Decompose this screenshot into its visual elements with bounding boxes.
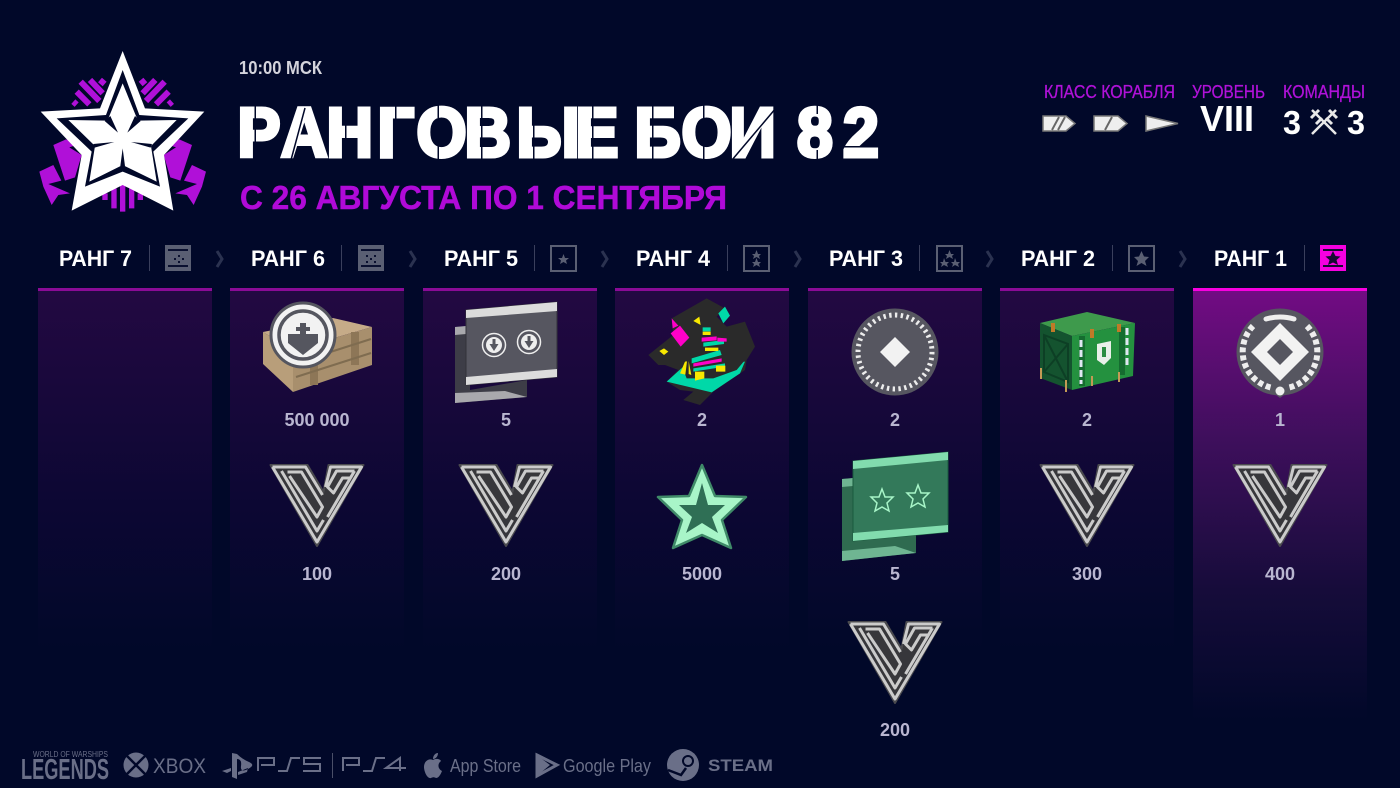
rank 1 <box>1214 245 1346 271</box>
logo: Google Play <box>537 755 651 776</box>
value: 2 <box>890 410 900 430</box>
value: 400 <box>1265 564 1295 584</box>
value: 5 <box>501 410 511 430</box>
title: РАНГОВЫЕ БОИ 82 <box>238 94 879 172</box>
rank 7: РАНГ 7 <box>59 246 132 271</box>
icon: silver V <box>848 622 942 703</box>
rank 2 <box>1021 245 1154 271</box>
icon: grey token <box>852 308 938 396</box>
panel: rank 1 <box>1193 288 1367 720</box>
logo: PS5 <box>222 753 321 779</box>
icon: cruiser <box>1043 116 1075 131</box>
arrow <box>1180 251 1185 267</box>
icon: green signal flags <box>842 452 948 561</box>
icon: credits crate with medal <box>263 303 372 392</box>
label: teams: КОМАНДЫ <box>1283 82 1365 102</box>
arrow <box>795 251 800 267</box>
teams value: 3 <box>1347 104 1365 141</box>
rank 3: РАНГ 3 <box>829 246 903 271</box>
divider <box>332 753 334 778</box>
icon: pinata camouflage <box>648 298 755 405</box>
subtitle: dates: С 26 АВГУСТА ПО 1 СЕНТЯБРЯ <box>240 179 727 216</box>
label: tier: УРОВЕНЬ <box>1192 82 1265 102</box>
icon: destroyer <box>1094 116 1127 131</box>
tier value: VIII <box>1200 98 1254 139</box>
icon: silver V <box>460 465 552 546</box>
arrow <box>217 251 222 267</box>
value: 5000 <box>682 564 722 584</box>
time label: 10:00 МСК <box>239 58 323 78</box>
logo: Xbox <box>124 752 206 778</box>
rank 5: РАНГ 5 <box>444 246 518 271</box>
logo: PS4 <box>343 758 406 771</box>
value: 200 <box>491 564 521 584</box>
icon: silver V <box>1040 465 1134 546</box>
logo: WoWS Legends: LEGENDS <box>21 754 109 786</box>
teams value <box>1283 104 1365 141</box>
logo: Google Play: Google Play <box>563 756 651 776</box>
panel: rank 3 <box>808 288 982 740</box>
icon: silver V <box>270 465 364 546</box>
rank 4 <box>636 245 769 271</box>
panel: rank 5 <box>423 288 597 650</box>
icon: laurel medal <box>1236 308 1324 398</box>
value: 200 <box>880 720 910 740</box>
platform logos <box>21 749 773 786</box>
value: 500 000 <box>284 410 350 430</box>
value: 5 <box>890 564 900 584</box>
logo: WoWS Legends: WORLD OF WARSHIPS <box>33 750 108 759</box>
logo: WoWS Legends <box>21 750 109 786</box>
panel: rank 6 <box>230 288 404 650</box>
panel: rank 7 <box>38 288 212 650</box>
rank header row <box>59 245 1346 271</box>
icon: submarine <box>1146 116 1178 131</box>
value: 100 <box>302 564 332 584</box>
logo: App Store: App Store <box>450 756 521 776</box>
arrow <box>410 251 415 267</box>
icon: grey signal flags <box>455 302 557 403</box>
rank 5 <box>444 245 576 271</box>
logo: Steam: STEAM <box>708 756 773 775</box>
rank 3 <box>829 245 962 271</box>
rank 4: РАНГ 4 <box>636 246 711 271</box>
rank 7 <box>59 245 191 271</box>
icon: star core <box>679 483 725 533</box>
value: 300 <box>1072 564 1102 584</box>
label: ship class: КЛАСС КОРАБЛЯ <box>1044 82 1175 102</box>
icon: green star <box>658 465 746 548</box>
icon: green crate <box>1040 312 1135 392</box>
teams value: 3 <box>1283 104 1301 141</box>
logo: Steam <box>667 749 773 781</box>
rank 6: РАНГ 6 <box>251 246 325 271</box>
arrow <box>602 251 607 267</box>
logo: App Store <box>424 753 521 778</box>
logo: Xbox: XBOX <box>153 755 206 778</box>
value: 2 <box>1082 410 1092 430</box>
rank 2: РАНГ 2 <box>1021 246 1095 271</box>
rank 6 <box>251 245 384 271</box>
panel: rank 4 <box>615 288 789 650</box>
rank 1: РАНГ 1 <box>1214 246 1287 271</box>
arrow <box>987 251 992 267</box>
panel: rank 2 <box>1000 288 1174 650</box>
value: 1 <box>1275 410 1285 430</box>
battle conditions <box>1043 82 1365 141</box>
value: 2 <box>697 410 707 430</box>
logo: ranked star emblem <box>39 51 206 212</box>
icon: silver V <box>1234 465 1326 546</box>
